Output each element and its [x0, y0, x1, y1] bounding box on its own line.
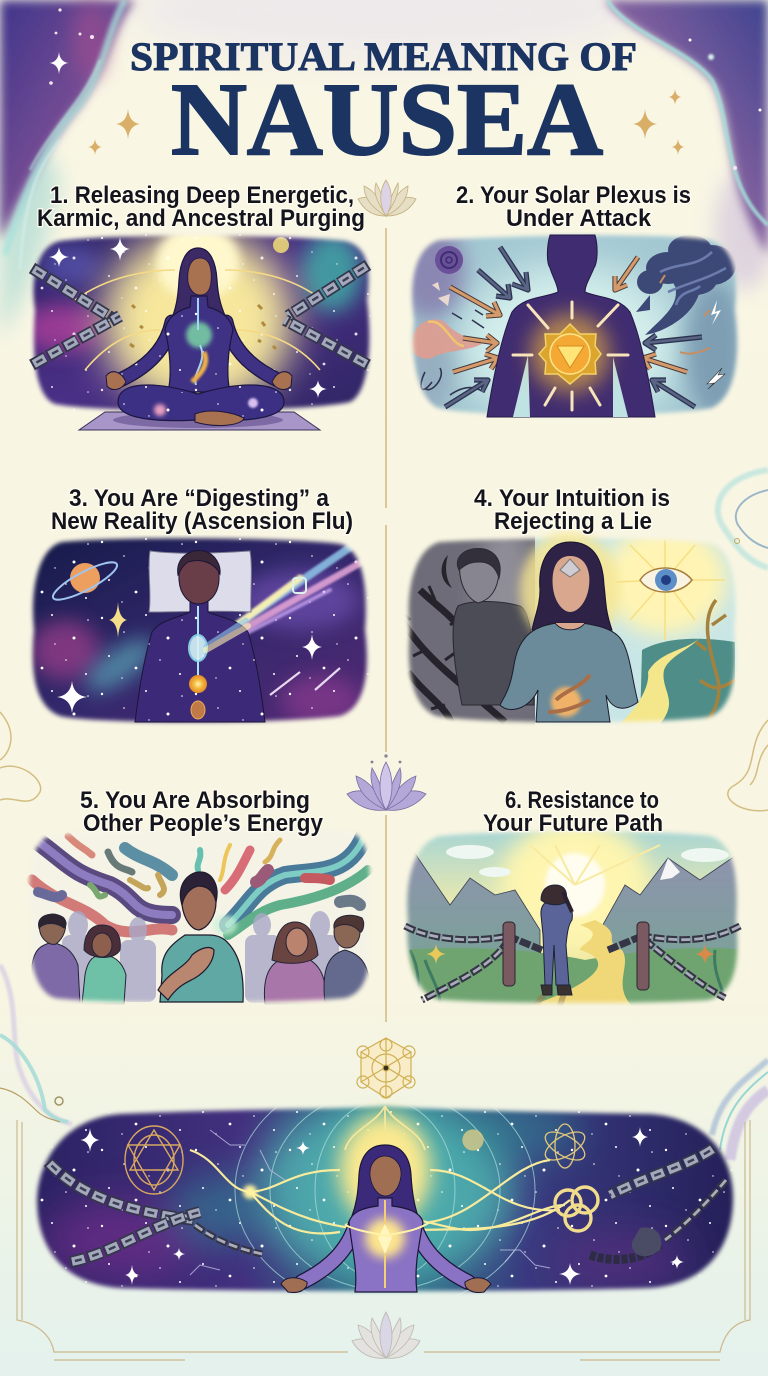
heading 6: 6. Resistance to — [505, 787, 659, 814]
heading 2: Under Attack — [506, 205, 652, 232]
panel 1: meditating woman breaking chains — [22, 224, 380, 430]
right mid swirl — [728, 720, 768, 811]
crowd — [32, 914, 370, 1004]
third eye in light — [640, 568, 692, 592]
arms — [302, 1224, 468, 1282]
chains right — [590, 1148, 726, 1259]
cosmic body overlay — [118, 307, 284, 421]
top-right nebula corner — [605, 0, 768, 255]
left side swirl — [0, 712, 41, 801]
silhouette — [487, 235, 655, 417]
heading 3: New Reality (Ascension Flu) — [51, 508, 353, 535]
heading 2 — [456, 182, 691, 232]
rainbow beam — [234, 544, 363, 636]
heading 4: 4. Your Intuition is — [474, 485, 670, 512]
galaxy background — [25, 535, 375, 730]
gold sparkles around title — [88, 89, 684, 155]
icon: lotus top — [358, 180, 416, 216]
stormy backdrop — [409, 232, 740, 418]
heading 3: 3. You Are “Digesting” a — [69, 485, 330, 512]
chains and posts — [405, 926, 740, 1000]
right side swirl — [718, 470, 768, 568]
icon: lotus centre — [347, 755, 426, 810]
panel 7: final release banner — [34, 1102, 736, 1294]
heading 1: 1. Releasing Deep Energetic, — [50, 182, 354, 209]
gold geometry left — [125, 1126, 183, 1194]
heading 6 — [483, 787, 663, 837]
heading 6: Your Future Path — [483, 810, 663, 837]
right energy waves — [228, 832, 366, 925]
meadow — [400, 948, 745, 1006]
title line 1: SPIRITUAL MEANING OF — [130, 34, 637, 79]
dark arrow fill — [445, 247, 702, 407]
heading 1: Karmic, and Ancestral Purging — [37, 205, 365, 232]
heading 5: Other People’s Energy — [83, 810, 324, 837]
bottom ornamental frame — [17, 1120, 750, 1360]
man in shadow — [453, 548, 534, 705]
halo — [339, 1114, 431, 1226]
body stars and chakras — [135, 612, 265, 722]
central man — [158, 872, 243, 1002]
pillow — [149, 551, 251, 612]
gold geometry right — [463, 1124, 589, 1168]
heart light — [365, 1218, 405, 1258]
heading 5 — [80, 787, 324, 837]
left energy waves — [32, 832, 368, 935]
bushes and path — [640, 639, 735, 724]
dark thorn branches — [402, 590, 505, 724]
panel 6: resistance to future path — [400, 820, 745, 1006]
panel 3: ascension flu — [25, 535, 375, 730]
cosmic background — [30, 232, 373, 412]
mat — [79, 412, 320, 430]
man walking — [541, 885, 572, 995]
woman — [500, 532, 638, 722]
torso — [165, 296, 233, 392]
torso — [349, 1198, 423, 1292]
split backdrop — [405, 536, 738, 725]
inner light arrows — [513, 302, 628, 410]
icon: lotus bottom — [352, 1312, 420, 1358]
legs — [118, 385, 284, 421]
galaxy band — [34, 1102, 736, 1294]
arm gaps — [513, 355, 628, 417]
orange arrow fill — [450, 257, 687, 372]
panel 2: solar plexus under attack — [409, 232, 740, 418]
solar plexus chakra — [530, 313, 610, 393]
heading 4 — [474, 485, 670, 535]
heading 2: 2. Your Solar Plexus is — [456, 182, 691, 209]
ghost silhouettes — [62, 911, 339, 1005]
woman — [106, 248, 292, 425]
golden path — [530, 920, 632, 1006]
woman centre — [281, 1145, 491, 1293]
energy lines — [190, 1150, 570, 1234]
heading 3 — [51, 485, 353, 535]
planet — [70, 563, 100, 593]
mountains — [404, 854, 540, 953]
panel 5: absorbing energy — [25, 826, 375, 1006]
title — [130, 34, 637, 177]
dark arrows — [445, 247, 702, 407]
heading 5: 5. You Are Absorbing — [80, 787, 310, 814]
orange arrows — [450, 257, 687, 372]
chains left — [48, 1162, 262, 1262]
heading 4: Rejecting a Lie — [494, 508, 652, 535]
arms — [120, 322, 278, 380]
title line 2: NAUSEA — [171, 62, 603, 177]
left lower swirl — [0, 965, 72, 1124]
heading 1 — [37, 182, 365, 232]
top-left nebula corner — [0, 0, 135, 270]
icon: sacred geometry — [357, 1038, 415, 1098]
right lower swirl — [712, 1060, 768, 1160]
man — [135, 550, 265, 722]
panel 4: intuition rejecting a lie — [400, 520, 745, 727]
chains — [32, 265, 368, 365]
centre divider — [385, 228, 387, 1022]
storm cloud — [636, 235, 736, 335]
